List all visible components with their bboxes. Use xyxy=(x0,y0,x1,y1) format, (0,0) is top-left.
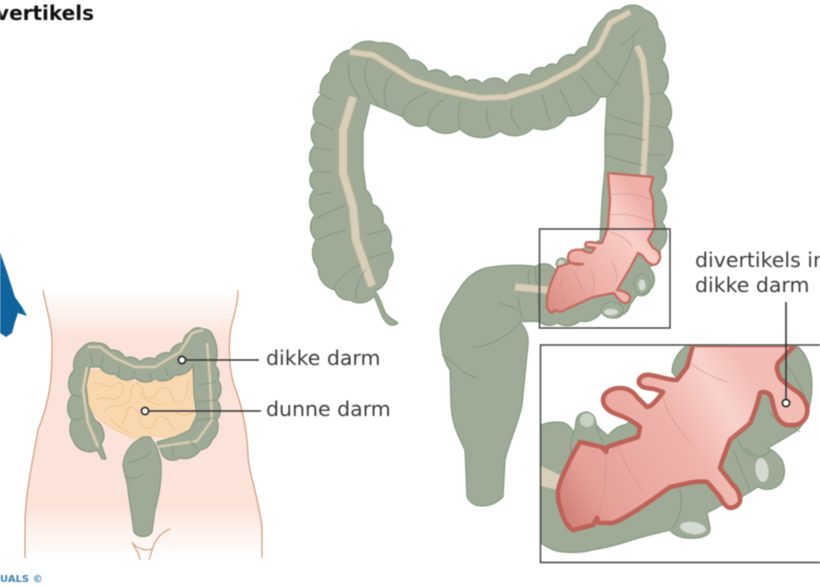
rectum xyxy=(440,265,555,506)
panel: body with intestines xyxy=(25,290,391,560)
inset box xyxy=(540,345,820,562)
label: divertikels in dikke darm: dikke darm xyxy=(695,273,809,297)
pink section xyxy=(547,173,660,313)
panel: large colon xyxy=(309,5,673,506)
label: dunne darm: dunne darm xyxy=(266,397,391,421)
small colon xyxy=(68,328,221,536)
colon folds xyxy=(315,28,666,298)
torso xyxy=(25,290,262,560)
icon: blue hand xyxy=(0,252,27,337)
inset band xyxy=(541,466,562,490)
colon bands xyxy=(343,12,647,290)
label: dikke darm xyxy=(178,346,380,370)
inset illustration xyxy=(541,345,812,552)
inset pink xyxy=(558,345,807,530)
label: divertikels in dikke darm xyxy=(695,248,820,407)
footer credit: UALS © xyxy=(0,574,43,585)
small intestine xyxy=(84,367,197,438)
diverticula small xyxy=(556,258,650,318)
inset light bubbles xyxy=(580,413,770,536)
small detail box xyxy=(540,229,670,328)
label: dunne darm xyxy=(141,397,391,421)
panel: inset detail xyxy=(540,248,820,562)
colon body xyxy=(309,5,673,326)
inset frame xyxy=(540,345,820,562)
rectum folds xyxy=(442,270,530,378)
label: dikke darm: dikke darm xyxy=(266,346,380,370)
inset folds xyxy=(565,362,750,522)
pink folds xyxy=(561,194,653,305)
